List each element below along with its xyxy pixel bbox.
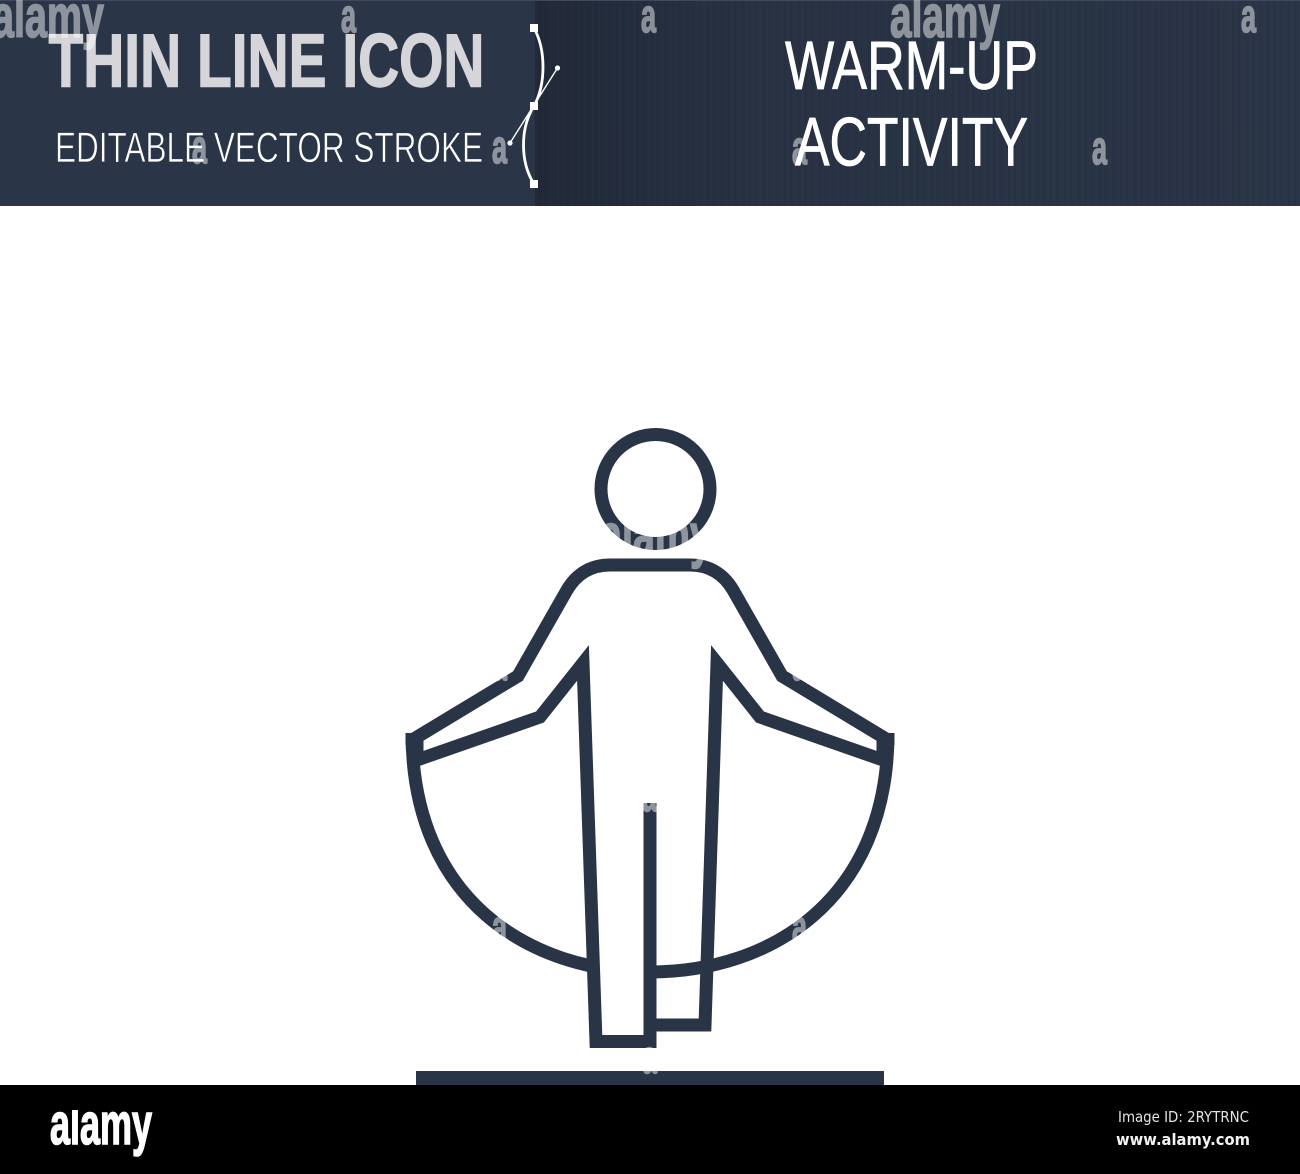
header banner [0, 0, 1300, 206]
watermark overlay: a [642, 768, 657, 821]
watermark overlay: a [792, 121, 807, 174]
title line two: ACTIVITY [795, 104, 1028, 180]
watermark overlay: a [1092, 121, 1107, 174]
watermark overlay: a [492, 637, 507, 690]
footer logo: alamy [50, 1092, 152, 1157]
heading: thin line icon: THIN LINE ICON [48, 18, 484, 102]
watermark overlay: alamy [600, 502, 712, 569]
watermark overlay: a [192, 120, 207, 173]
header left panel [0, 0, 535, 206]
subheading: editable vector stroke: EDITABLE VECTOR STROKE [55, 124, 483, 172]
title line one: WARM-UP [785, 27, 1038, 104]
watermark overlay: a [642, 1030, 657, 1083]
image id: Image ID: 2RYTRNC [1118, 1108, 1249, 1126]
watermark overlay: a [492, 120, 507, 173]
watermark overlay: a [792, 900, 807, 953]
footer bar [0, 1085, 1300, 1174]
right body and arm [650, 565, 883, 1025]
icon: person jumping rope [412, 434, 888, 1048]
ground bar [416, 1071, 884, 1085]
icon: bezier curve handles [507, 24, 560, 188]
left body and arm [417, 565, 656, 1042]
rope left part [406, 745, 588, 972]
watermark overlay: a [492, 900, 507, 953]
rope right part [650, 733, 888, 972]
header right panel [535, 0, 1300, 206]
head [601, 434, 710, 544]
raised leg line [644, 803, 656, 1048]
website: www.alamy.com [1116, 1130, 1250, 1149]
watermark overlay: a [792, 637, 807, 690]
